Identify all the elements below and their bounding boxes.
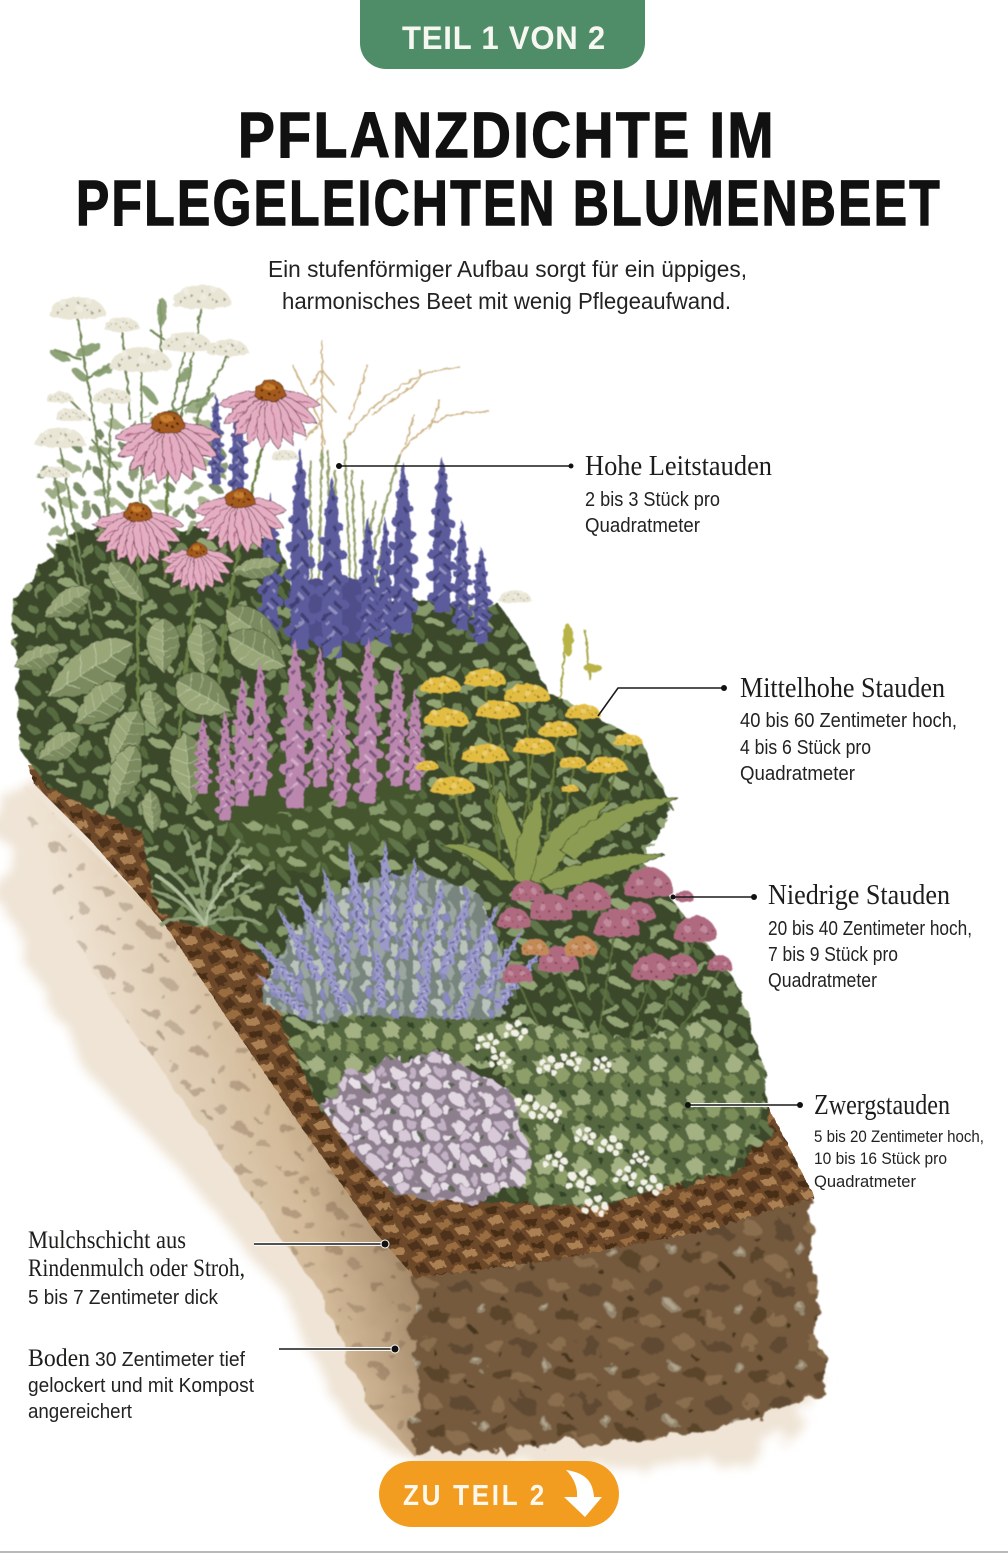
foliage texture over the backdrop — [15, 520, 770, 1205]
badge: Teil 1 von 2: TEIL 1 VON 2 — [402, 20, 606, 56]
soil cross-section front — [415, 1195, 826, 1455]
callout: Mittelhohe Stauden: Mittelhohe Stauden — [740, 673, 945, 704]
callout: Boden: angereichert — [28, 1401, 132, 1423]
subtitle: Ein stufenförmiger Aufbau sorgt für ein üppiges, — [268, 256, 747, 282]
callout: Niedrige Stauden: 20 bis 40 Zentimeter hoch, — [768, 918, 972, 940]
pink sedum — [497, 867, 740, 1060]
callout: Niedrige Stauden — [670, 880, 972, 992]
title — [76, 99, 942, 239]
callout: Niedrige Stauden: Quadratmeter — [768, 970, 877, 992]
callout: Zwergstauden: 5 bis 20 Zentimeter hoch, — [814, 1127, 984, 1146]
lavender — [250, 840, 545, 1035]
callout: Boden — [28, 1345, 399, 1423]
callout: Mittelhohe Stauden: 4 bis 6 Stück pro — [740, 737, 871, 759]
small grass clump — [150, 830, 262, 925]
plant mass backdrop — [15, 520, 770, 1205]
callout: Hohe Leitstauden: 2 bis 3 Stück pro — [585, 489, 720, 511]
callout: Mittelhohe Stauden: Quadratmeter — [740, 763, 855, 785]
planting — [11, 285, 770, 1217]
feathery foliage above the mass — [35, 400, 240, 570]
button: Zu Teil 2: ZU TEIL 2 — [403, 1480, 547, 1512]
callout: Zwergstauden — [685, 1090, 984, 1191]
subtitle: harmonisches Beet mit wenig Pflegeaufwand. — [282, 288, 731, 314]
callout: Mulchschicht: Mulchschicht aus — [28, 1227, 186, 1254]
callout: Mulchschicht: Rindenmulch oder Stroh, — [28, 1255, 245, 1282]
callout: Boden: 30 Zentimeter tief — [95, 1349, 245, 1371]
coneflower plants — [11, 380, 322, 835]
callout: Niedrige Stauden: 7 bis 9 Stück pro — [768, 944, 898, 966]
callout: Boden: Boden — [28, 1345, 90, 1372]
button: Zu Teil 2 — [379, 1461, 619, 1527]
callout: Mulchschicht: 5 bis 7 Zentimeter dick — [28, 1287, 219, 1309]
icon: curved arrow — [564, 1470, 602, 1517]
callout: Hohe Leitstauden: Hohe Leitstauden — [585, 451, 772, 482]
salvia lower leaves — [290, 630, 545, 730]
callout: Hohe Leitstauden — [336, 451, 772, 537]
tall blue salvia — [208, 393, 493, 658]
callouts and labels — [28, 451, 984, 1423]
white alyssum — [475, 1020, 662, 1217]
pink salvia spikes — [194, 636, 430, 890]
callout: Zwergstauden: Quadratmeter — [814, 1172, 916, 1191]
bottom edge line — [0, 1551, 1008, 1553]
ground cover — [285, 1015, 765, 1205]
callout: Hohe Leitstauden: Quadratmeter — [585, 515, 700, 537]
side face of the soil — [24, 785, 416, 1458]
mulch layer — [28, 760, 815, 1278]
badge: Teil 1 von 2 — [360, 0, 645, 69]
callout: Zwergstauden: Zwergstauden — [814, 1090, 950, 1121]
callout: Zwergstauden: 10 bis 16 Stück pro — [814, 1149, 947, 1168]
soil wash background — [0, 765, 835, 1472]
callout: Mittelhohe Stauden: 40 bis 60 Zentimeter hoch, — [740, 710, 957, 732]
callout: Mittelhohe Stauden — [598, 673, 957, 785]
ornamental grass — [293, 340, 490, 640]
title: PFLANZDICHTE IM — [238, 99, 776, 171]
subtitle — [268, 256, 747, 314]
callout: Mulchschicht — [28, 1227, 389, 1309]
lilac thyme — [320, 1050, 530, 1205]
yellow yarrow — [415, 624, 678, 895]
tall yarrow plants — [34, 285, 532, 620]
callout: Niedrige Stauden: Niedrige Stauden — [768, 880, 950, 911]
callout: Boden: gelockert und mit Kompost — [28, 1375, 254, 1397]
